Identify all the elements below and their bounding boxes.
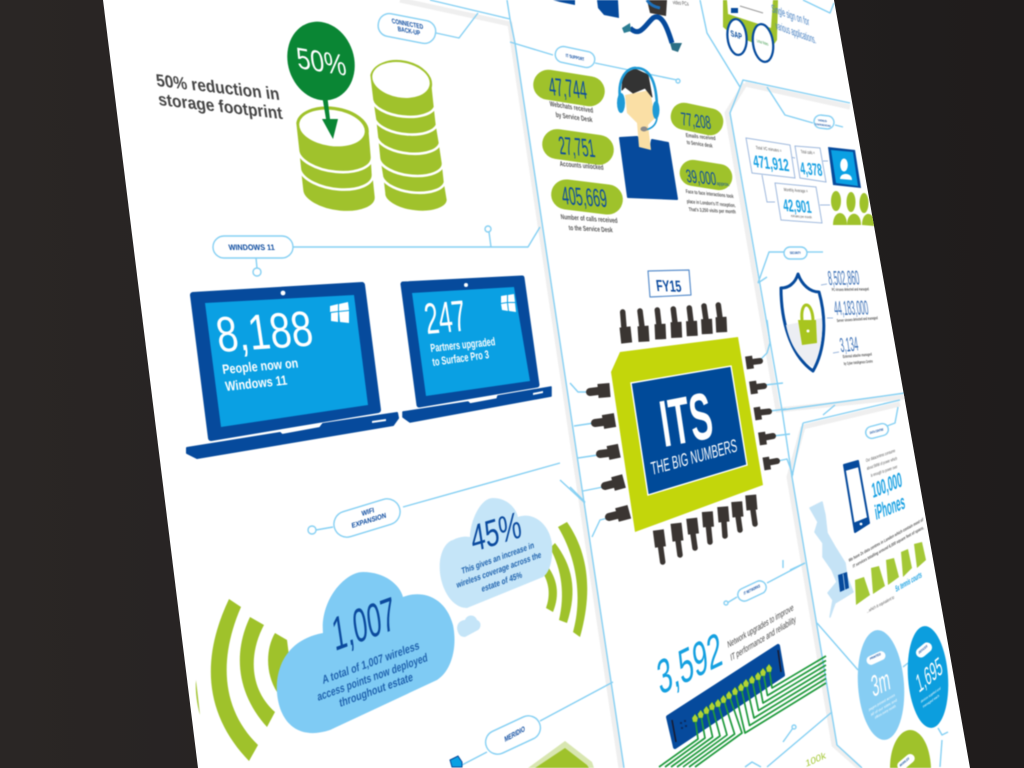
icon: meridio device <box>450 756 462 767</box>
icon: windows logo <box>501 294 516 312</box>
stat: accounts unlocked: Accounts unlocked <box>559 160 604 172</box>
panel: cloud 1,007 access points: access points now deployed <box>317 651 428 704</box>
text: iphone power equivalence <box>865 448 906 525</box>
heading pill: connected back-up: CONNECTED <box>391 18 424 31</box>
storage reduction caption <box>156 74 284 120</box>
stats: security numbers: External attacks managed <box>842 351 872 359</box>
icon: 50% pin and arrow <box>286 20 356 140</box>
stat: visits to reception: Face to face interactions took <box>685 189 734 200</box>
text: iphone power equivalence: 100,000 <box>870 469 903 503</box>
heading pill: video conferencing <box>813 114 835 130</box>
panel: laptop 247: Partners upgraded <box>430 336 496 355</box>
heading pill: windows 11 <box>213 226 540 276</box>
icon: iphone <box>844 461 869 532</box>
icon: right coin stack <box>369 58 448 212</box>
stat bubble: 1,695: DEVICES <box>918 643 928 655</box>
icon: tennis courts <box>855 542 926 605</box>
stats: security numbers: 3,134 <box>838 334 860 357</box>
stat bubble: green: MOBILES <box>899 756 910 768</box>
stat: network upgrades: 3,592 <box>654 621 725 705</box>
box: total minutes: 471,912 <box>752 151 790 175</box>
text: iphone power equivalence: is enough to power over <box>870 464 898 478</box>
stat: emails received: 77,208 <box>680 108 712 133</box>
text: data centres description <box>848 517 924 569</box>
heading pill: it networks: IT NETWORKS <box>743 583 760 596</box>
stat bubble: 3m: all of our sites and <box>871 698 897 717</box>
icon: navy device and caption <box>553 0 689 18</box>
icon: meridio green hexagon <box>528 741 594 768</box>
text: iphone power equivalence: Our datacentres consume <box>865 448 896 463</box>
text: tennis courts equivalent <box>866 569 922 614</box>
text: data centres description: IT services totalling around 6,000 square feet of space, <box>852 525 924 569</box>
stat bubble: 1,695 <box>904 625 952 729</box>
chart: network switch with cables <box>659 646 826 767</box>
heading: FY15: FY15 <box>655 277 683 296</box>
icon: uk map <box>810 502 853 617</box>
chip graphic: ITS <box>655 378 717 461</box>
icon: windows logo <box>330 302 349 323</box>
stats: security numbers: 8,502,860 <box>827 268 861 290</box>
icon: navy device and caption: video PCs <box>672 0 689 8</box>
stat bubble: 3m: pages printed across <box>869 693 895 712</box>
box: total calls: 4,378 <box>799 158 824 180</box>
stats: security numbers: PC viruses detected and managed <box>831 286 869 292</box>
heading pill: wifi expansion: WIFI <box>361 507 375 518</box>
stat: calls received: to the Service Desk <box>568 225 613 234</box>
storage reduction caption: storage footprint <box>157 89 284 123</box>
poster sheet: 44,183,000 <box>833 298 870 320</box>
stat: webchats received <box>531 68 607 124</box>
heading pill: windows 11: WINDOWS 11 <box>228 243 276 252</box>
stat: emails received <box>668 100 726 150</box>
panel: cloud 45% coverage: This gives an increase in <box>461 540 535 576</box>
heading pill: security <box>758 247 823 283</box>
stat bubble: 1,695: 1,695 <box>913 651 945 698</box>
chip graphic: THE BIG NUMBERS <box>650 435 738 479</box>
box: monthly average: minutes per month <box>791 214 812 219</box>
heading pill: data centre <box>864 422 890 440</box>
icon: single sign-on window <box>723 0 778 63</box>
heading pill: data centre: DATA CENTRE <box>870 427 884 435</box>
stat: webchats received: by Service Desk <box>555 111 593 124</box>
stat: visits to reception <box>678 158 736 215</box>
switch body <box>668 646 783 747</box>
stat bubble: 3m: offices every month <box>875 704 896 720</box>
SAP badge: SAP <box>730 28 743 42</box>
icon: left wifi arcs <box>196 599 292 761</box>
box: monthly average <box>775 183 822 223</box>
box: total minutes <box>746 138 795 178</box>
stat: visits to reception: approx. <box>716 181 730 188</box>
stat: accounts unlocked: 27,751 <box>557 132 597 163</box>
panel: laptop 247: 247 <box>421 292 469 344</box>
heading pill: meridio <box>462 682 613 765</box>
chip label square <box>631 366 747 495</box>
panel: cloud 45% coverage: wireless coverage across the <box>455 549 542 590</box>
text: iphone power equivalence: about 5MW of power which <box>866 455 898 471</box>
stat: calls received: Number of calls received <box>560 214 618 225</box>
panel: cloud 45% coverage: 45% <box>468 503 524 560</box>
heading pill: wifi expansion: EXPANSION <box>351 513 387 530</box>
panel dividers and circuit lines <box>400 0 948 768</box>
stat: webchats received: Webchats received <box>549 100 594 115</box>
stat: webchats received: 47,744 <box>547 73 589 105</box>
caption: single sign on: Single sign on for <box>771 3 810 29</box>
heading pill: it support: IT SUPPORT <box>565 53 585 62</box>
panel: laptop 8,188 <box>187 285 398 458</box>
icon: right wifi arcs <box>543 522 587 637</box>
heading: FY15 <box>648 270 691 297</box>
stat: visits to reception: place in London's IT reception. <box>686 199 736 209</box>
stat: emails received: Emails received <box>685 133 717 142</box>
panel: cloud 45% coverage: estate of 45% <box>481 569 523 594</box>
laptop base <box>403 387 551 422</box>
poster sheet: iPhones <box>873 491 906 525</box>
storage reduction caption: 50% reduction in <box>155 70 281 104</box>
text: data centres description: We have 2x data centres in London which contain most of <box>848 517 924 563</box>
stat bubble: 1,695: devices supplied and <box>921 686 941 704</box>
stat bubble: 1,695: managed each <box>923 693 940 709</box>
panel: laptop 8,188: Windows 11 <box>224 373 288 394</box>
box: monthly average: 42,901 <box>782 195 813 217</box>
stat bubble: green <box>890 730 931 768</box>
panel: cloud 1,007 access points <box>277 572 455 733</box>
heading pill: connected back-up <box>376 12 478 45</box>
icon: security shield <box>781 274 824 371</box>
panel: laptop 8,188: 8,188 <box>212 301 316 363</box>
second application badge: Lotus Notes <box>756 38 769 47</box>
panel: cloud 1,007 access points: throughout estate <box>339 670 414 710</box>
panel: laptop 247 <box>403 278 551 422</box>
stat: network upgrades: IT performance and reliability <box>730 613 797 663</box>
icon: service desk agent <box>617 68 677 199</box>
text: tennis courts equivalent: ...which is equivalent to <box>866 594 895 614</box>
panel: cloud 45% coverage <box>440 498 552 608</box>
stat bubble: 3m: PRINTED <box>870 652 882 661</box>
stats: security numbers <box>821 268 878 366</box>
chip graphic <box>590 305 777 562</box>
stat: calls received <box>549 178 625 234</box>
heading pill: it networks <box>724 579 768 605</box>
icon: 50% pin and arrow: 50% <box>294 42 348 83</box>
panel: laptop 247: to Surface Pro 3 <box>432 349 490 369</box>
heading pill: it support <box>510 42 680 83</box>
chip body <box>611 337 763 532</box>
panel: cloud 1,007 access points: 1,007 <box>329 586 399 661</box>
heading pill: wifi expansion <box>308 496 403 540</box>
icon: audience <box>831 191 875 226</box>
heading pill: security: SECURITY <box>790 251 802 255</box>
icon: video screen <box>828 147 861 188</box>
box: total minutes: Total VC minutes = <box>755 145 782 153</box>
stats: security numbers: by Cyber Intelligence Centre <box>843 358 873 366</box>
heading pill: video conferencing: CONFERENCING <box>815 122 831 128</box>
stat boxes: video conferencing <box>746 138 830 223</box>
stat: network upgrades: Network upgrades to improve <box>727 602 794 650</box>
stat: visits to reception: That's 3,250 visits per month <box>688 207 736 215</box>
panel: cloud 1,007 access points: A total of 1,007 wireless <box>322 639 420 687</box>
box: monthly average: Monthly Average = <box>783 187 808 194</box>
laptop base <box>187 413 398 458</box>
box: total calls: Total calls = <box>800 149 815 155</box>
text: tennis courts equivalent: 5x tennis courts <box>895 569 922 594</box>
stat: visits to reception: 39,000 <box>685 165 717 189</box>
box: total calls <box>795 146 826 182</box>
caption: single sign on <box>771 3 817 47</box>
cable plugs <box>692 664 772 722</box>
chip pins <box>590 305 777 562</box>
stat: accounts unlocked <box>540 127 616 172</box>
stat bubble: 3m: 3m <box>869 663 892 704</box>
icon: small cloud <box>457 616 480 637</box>
stat: emails received: to Service desk <box>686 140 714 150</box>
network cables <box>659 656 826 767</box>
icon: left coin stack <box>295 105 376 212</box>
poster sheet: various applications. <box>775 20 817 47</box>
stat: calls received: 405,669 <box>560 182 609 213</box>
stats: security numbers: Server viruses detected and managed <box>836 315 878 323</box>
stat bubble: 3m <box>854 629 908 741</box>
heading pill: connected back-up: BACK-UP <box>397 26 421 38</box>
heading pill: video conferencing: VIDEO <box>818 118 827 123</box>
heading pill: meridio: MERIDIO <box>504 724 526 744</box>
icon: running figure <box>622 0 682 52</box>
panel: laptop 8,188: People now on <box>221 355 299 377</box>
